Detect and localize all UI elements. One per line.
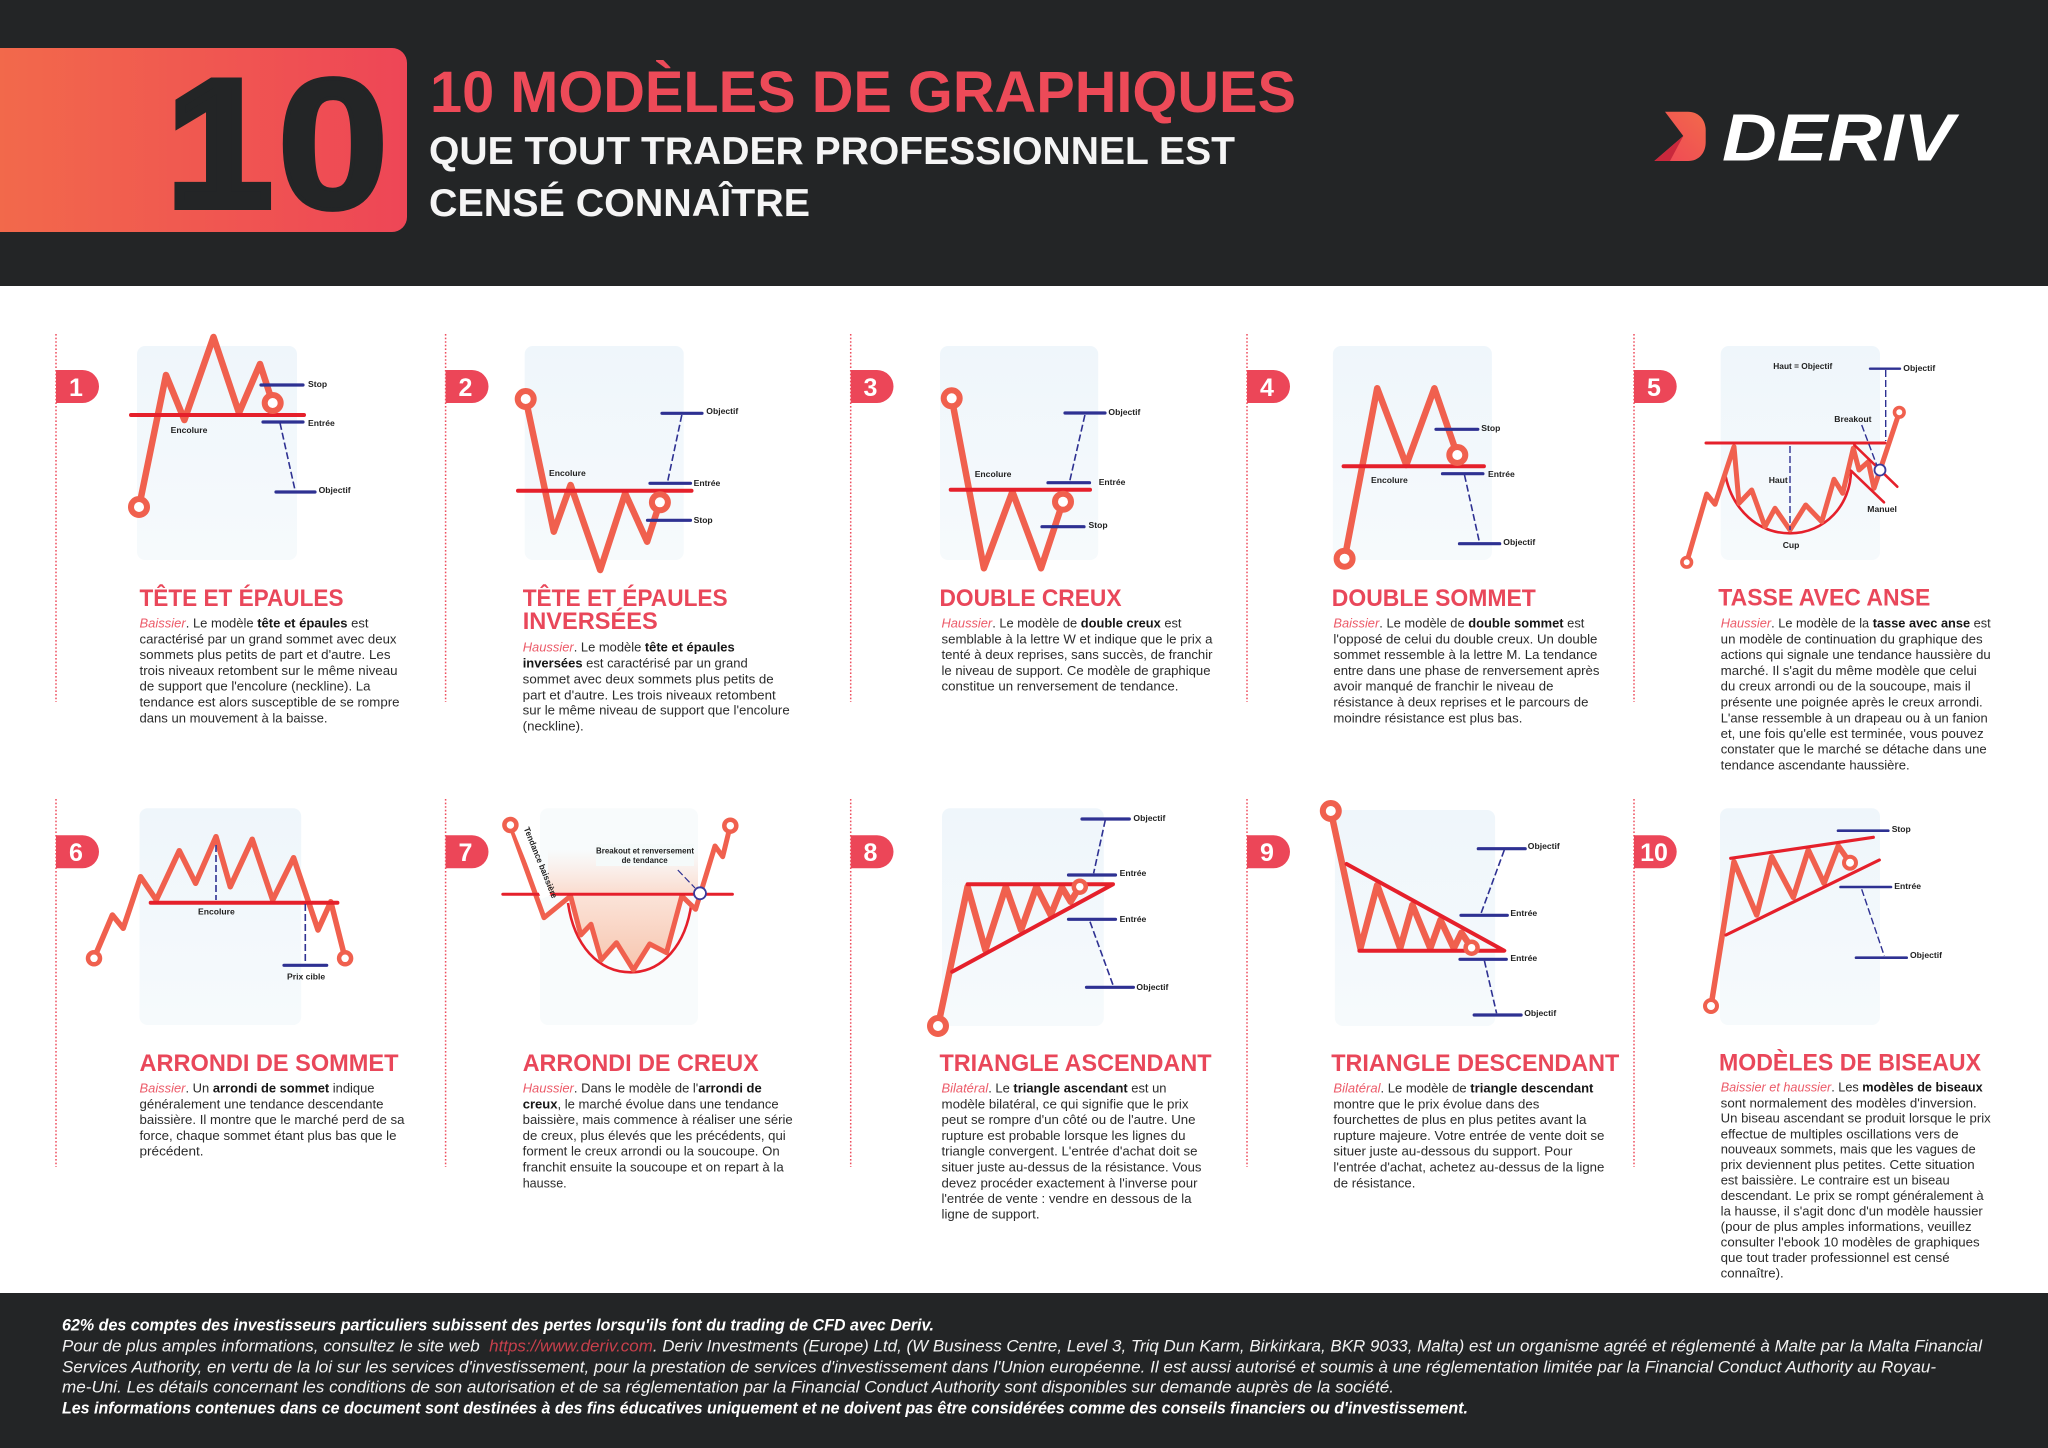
description 9: de résistance. [1333,1175,1415,1190]
number badge 7: 7 [459,839,472,867]
description 2: sommet avec deux sommets plus petits de [523,671,774,686]
description 4 [1333,615,1600,725]
heading 4: DOUBLE SOMMET [1332,585,1536,612]
chart 9: Entrée [1510,953,1537,963]
chart 1: Encolure [171,425,208,435]
description 7: creux, le marché évolue dans une tendance [523,1096,779,1111]
panel 7: arrondi de creux [446,799,793,1190]
footer disclaimer: Services Authority, en vertu de la loi sur les services d'investissement, pour la prestation de services d'investissement dans l'Union européenne. Il est aussi autorisé et soumis à une réglementation limitée par la Financial Conduct Authority au Royau- [62,1357,1936,1376]
header band [0,0,2048,286]
description 4: résistance à deux reprises et le parcours de [1333,695,1588,710]
description 4: sommet ressemble à la lettre M. La tendance [1333,647,1597,662]
description 8: peut se rompre d'un côté ou de l'autre. Une [942,1112,1196,1127]
chart 8: Entrée [1120,914,1147,924]
panel 5: tasse avec anse [1634,334,1991,772]
chart 4: Entrée [1488,469,1515,479]
number badge 6: 6 [69,839,83,867]
chart 6: Encolure [198,906,235,916]
description 3: tenté à deux reprises, sans succès, de franchir [942,647,1213,662]
chart 8 [930,808,1169,1034]
description 3: le niveau de support. Ce modèle de graphique [942,663,1210,678]
chart 4: Objectif [1503,537,1535,547]
description 2: Haussier. Le modèle tête et épaules [523,640,735,655]
description 8: l'entrée de vente : vendre en dessous de la [942,1191,1192,1206]
description 3: semblable à la lettre W et indique que le prix a [942,631,1213,646]
description 6: précédent. [140,1144,204,1159]
heading 8: TRIANGLE ASCENDANT [940,1050,1212,1077]
description 1 [140,615,400,725]
number badge 10 [1634,835,1677,868]
number badge 5 [1634,370,1677,403]
main title: 10 MODÈLES DE GRAPHIQUES [430,60,1296,125]
heading 3: DOUBLE CREUX [940,585,1122,612]
number badge 10: 10 [1640,839,1668,867]
description 5: tendance ascendante haussière. [1721,757,1910,772]
description 1: trois niveaux retombent sur le même niveau [140,663,398,678]
chart 7: Breakout et renversement [596,846,694,856]
description 5: Haussier. Le modèle de la tasse avec anse est [1721,615,1991,630]
description 4: Baissier. Le modèle de double sommet est [1333,615,1585,630]
chart 4 [1333,346,1535,567]
description 4: entre dans une phase de renversement après [1333,663,1600,678]
chart 2 [518,346,738,570]
gradient number box [0,48,407,232]
heading 2: TÊTE ET ÉPAULES [523,584,728,612]
number badge 2: 2 [459,374,472,402]
footer disclaimer: me-Uni. Les détails concernant les conditions de son autorisation et de sa réglementation par la Financial Conduct Authority sont disponibles sur demande auprès de la société. [62,1378,1394,1397]
description 8: ligne de support. [942,1207,1040,1222]
description 9: montre que le prix évolue dans des [1333,1096,1540,1111]
description 6: baissière. Il montre que le marché perd de sa [140,1112,405,1127]
chart 10 [1705,808,1942,1025]
chart 5: Haut = Objectif [1773,361,1832,371]
chart 5: Haut [1769,475,1788,485]
description 9: l'entrée d'achat, achetez au-dessus de la ligne [1333,1160,1604,1175]
footer disclaimer: Les informations contenues dans ce document sont destinées à des fins éducatives uniquement et ne doivent pas être considérées comme des conseils financiers ou d'investissement. [62,1398,1468,1417]
number badge 2 [446,370,489,403]
description 9 [1333,1080,1604,1190]
description 8 [942,1080,1202,1222]
description 6 [140,1080,405,1159]
panel 8: triangle ascendant [851,799,1212,1222]
description 10 [1721,1080,1991,1281]
heading 2: INVERSÉES [523,607,658,635]
description 10: est baissière. Le contraire est un biseau [1721,1173,1950,1188]
description 9: Bilatéral. Le modèle de triangle descendant [1333,1080,1594,1095]
number badge 1: 1 [69,374,83,402]
chart 3: Stop [1088,520,1108,530]
description 4: l'opposé de celui du double creux. Un double [1333,631,1597,646]
number badge 8: 8 [864,839,878,867]
number badge 8 [851,835,894,868]
panel 9: triangle descendant [1247,799,1620,1190]
chart 4: Encolure [1371,475,1408,485]
description 9: situer juste au-dessous du support. Pour [1333,1144,1573,1159]
chart 3: Encolure [975,469,1012,479]
description 5: L'anse ressemble à un drapeau ou à un fanion [1721,710,1988,725]
chart 9: Objectif [1524,1008,1556,1018]
number badge 7 [446,835,489,868]
description 3: Haussier. Le modèle de double creux est [942,615,1182,630]
heading 1: TÊTE ET ÉPAULES [140,584,344,612]
chart 7: Tendance baissière [522,825,560,900]
description 7: Haussier. Dans le modèle de l'arrondi de [523,1080,762,1095]
icon: Deriv logo mark [1654,112,1706,161]
footer disclaimer [0,1293,2048,1448]
number badge 1 [56,370,99,403]
description 10: connaître). [1721,1266,1784,1281]
description 3: constitue un renversement de tendance. [942,679,1178,694]
description 5: constater que le marché se détache dans une [1721,742,1987,757]
footer disclaimer: Pour de plus amples informations, consultez le site web https://www.deriv.com. Deriv Investments (Europe) Ltd, (W Business Centre, Level 3, Triq Dun Karm, Birkirkara, BKR 9033, Malta) est un organisme agréé et réglementé à Malte par la Malta Financial [62,1337,1983,1356]
description 8: devez procéder exactement à l'inverse pour [942,1175,1198,1190]
description 10: effectue de multiples oscillations vers de [1721,1126,1959,1141]
description 6: force, chaque sommet étant plus bas que le [140,1128,396,1143]
description 5: un modèle de continuation du graphique des [1721,631,1983,646]
description 2: part et d'autre. Les trois niveaux retombent [523,687,776,702]
panel 3: double creux [851,334,1213,702]
chart 2: Entrée [694,478,721,488]
heading 7: ARRONDI DE CREUX [523,1050,759,1077]
description 7: hausse. [523,1175,567,1190]
big number 10 [168,41,389,248]
description 10: prix deviennent plus petites. Cette situation [1721,1157,1975,1172]
number badge 3 [851,370,894,403]
heading 2 [523,584,728,635]
description 10: (pour de plus amples informations, veuillez [1721,1219,1972,1234]
chart 2: Stop [694,515,713,525]
panel 1: tête et épaules [56,334,400,725]
chart 1: Objectif [319,485,351,495]
number badge 6 [56,835,99,868]
description 9: fourchettes de plus en plus petites avant la [1333,1112,1587,1127]
description 5 [1721,615,1991,772]
chart 5: Manuel [1867,504,1897,514]
number badge 9: 9 [1260,839,1274,867]
chart 5: Breakout [1834,414,1872,424]
chart 10: Entrée [1894,881,1921,891]
description 4: moindre résistance est plus bas. [1333,710,1522,725]
chart 9: Objectif [1528,841,1560,851]
description 5: présente une poignée après le creux arrondi. [1721,695,1983,710]
description 5: du creux arrondi ou de la soucoupe, mais il [1721,679,1971,694]
panel 4: double sommet [1247,334,1600,725]
description 7 [523,1080,793,1190]
description 5: marché. Il s'agit du même modèle que celui [1721,663,1977,678]
description 9: rupture majeure. Votre entrée de vente doit se [1333,1128,1604,1143]
chart 3: Entrée [1099,477,1126,487]
description 7: baissière, mais commence à réaliser une série [523,1112,793,1127]
subtitle line 2: CENSÉ CONNAÎTRE [429,181,810,225]
description 5: et, une fois qu'elle est terminée, vous pouvez [1721,726,1984,741]
description 6: généralement une tendance descendante [140,1096,384,1111]
number badge 3: 3 [864,374,877,402]
chart 8: Entrée [1120,868,1147,878]
description 1: tendance est alors susceptible de se rompre [140,695,400,710]
description 2: (neckline). [523,718,584,733]
chart 6: Prix cible [287,972,325,982]
description 8: rupture est probable lorsque les lignes du [942,1128,1186,1143]
description 10: consulter l'ebook 10 modèles de graphiques [1721,1235,1980,1250]
panel 2: tête et épaules inversées [446,334,790,733]
description 10: nouveaux sommets, mais que les vagues de [1721,1142,1976,1157]
description 8: modèle bilatéral, ce qui signifie que le prix [942,1096,1189,1111]
footer disclaimer: 62% des comptes des investisseurs particuliers subissent des pertes lorsqu'ils font du trading de CFD avec Deriv. [62,1316,934,1335]
description 3 [942,615,1213,694]
chart 7: de tendance [622,855,668,865]
heading 6: ARRONDI DE SOMMET [140,1050,399,1077]
description 8: triangle convergent. L'entrée d'achat doit se [942,1144,1198,1159]
big number 10: 1 [168,44,271,243]
chart 2: Encolure [549,468,586,478]
big number 10: 0 [277,41,389,248]
description 1: de support que l'encolure (neckline). La [140,679,371,694]
chart 1: Stop [308,379,327,389]
description 1: Baissier. Le modèle tête et épaules est [140,615,369,630]
chart 9 [1323,803,1560,1026]
description 10: Un biseau ascendant se produit lorsque le prix [1721,1111,1991,1126]
heading 5: TASSE AVEC ANSE [1718,585,1930,612]
chart 5: Objectif [1903,363,1935,373]
chart 4: Stop [1481,423,1500,433]
chart 3: Objectif [1108,407,1141,417]
description 6: Baissier. Un arrondi de sommet indique [140,1080,374,1095]
description 8: situer juste au-dessus de la résistance. Vous [942,1160,1202,1175]
chart 2: Objectif [706,406,738,416]
panel 6: arrondi de sommet [56,799,405,1167]
chart 6 [88,808,351,1025]
description 10: la hausse, il s'agit donc d'un modèle haussier [1721,1204,1983,1219]
chart 10: Stop [1892,824,1911,834]
heading 9: TRIANGLE DESCENDANT [1331,1050,1620,1077]
chart 10: Objectif [1910,950,1942,960]
chart 8: Objectif [1133,813,1166,823]
description 1: sommets plus petits de part et d'autre. Les [140,647,391,662]
description 8: Bilatéral. Le triangle ascendant est un [942,1080,1166,1095]
description 7: forment le creux arrondi ou la soucoupe. On [523,1144,780,1159]
chart 7 [503,808,736,1025]
number badge 4 [1247,370,1290,403]
chart 5 [1682,346,1935,567]
description 10: que tout trader professionnel est censé [1721,1250,1950,1265]
description 10: sont normalement des modèles d'inversion. [1721,1095,1977,1110]
description 10: descendant. Le prix se rompt généralement à [1721,1188,1984,1203]
description 2: inversées est caractérisé par un grand [523,656,748,671]
panel 10: modèles de biseaux [1634,799,1991,1281]
chart 1: Entrée [308,418,335,428]
description 2: sur le même niveau de support que l'encolure [523,703,790,718]
number badge 5: 5 [1647,374,1661,402]
description 1: caractérisé par un grand sommet avec deux [140,631,397,646]
number badge 4: 4 [1260,374,1274,402]
chart 8: Objectif [1136,982,1169,992]
description 5: actions qui signale une tendance haussière du [1721,647,1991,662]
chart 5: Cup [1783,540,1799,550]
chart 3 [940,346,1141,568]
subtitle line 1: QUE TOUT TRADER PROFESSIONNEL EST [429,130,1235,173]
heading 10: MODÈLES DE BISEAUX [1719,1049,1981,1077]
description 10: Baissier et haussier. Les modèles de biseaux [1721,1080,1983,1095]
logo wordmark: DERIV [1722,101,1960,176]
chart 9: Entrée [1510,908,1537,918]
description 7: de creux, plus élevés que les précédents, qui [523,1128,786,1143]
number badge 9 [1247,835,1290,868]
description 1: dans un mouvement à la baisse. [140,710,328,725]
chart 1 [131,337,351,560]
description 2 [523,640,790,733]
description 7: franchit ensuite la soucoupe et on repart à la [523,1160,784,1175]
description 4: avoir manqué de franchir le niveau de [1333,679,1553,694]
